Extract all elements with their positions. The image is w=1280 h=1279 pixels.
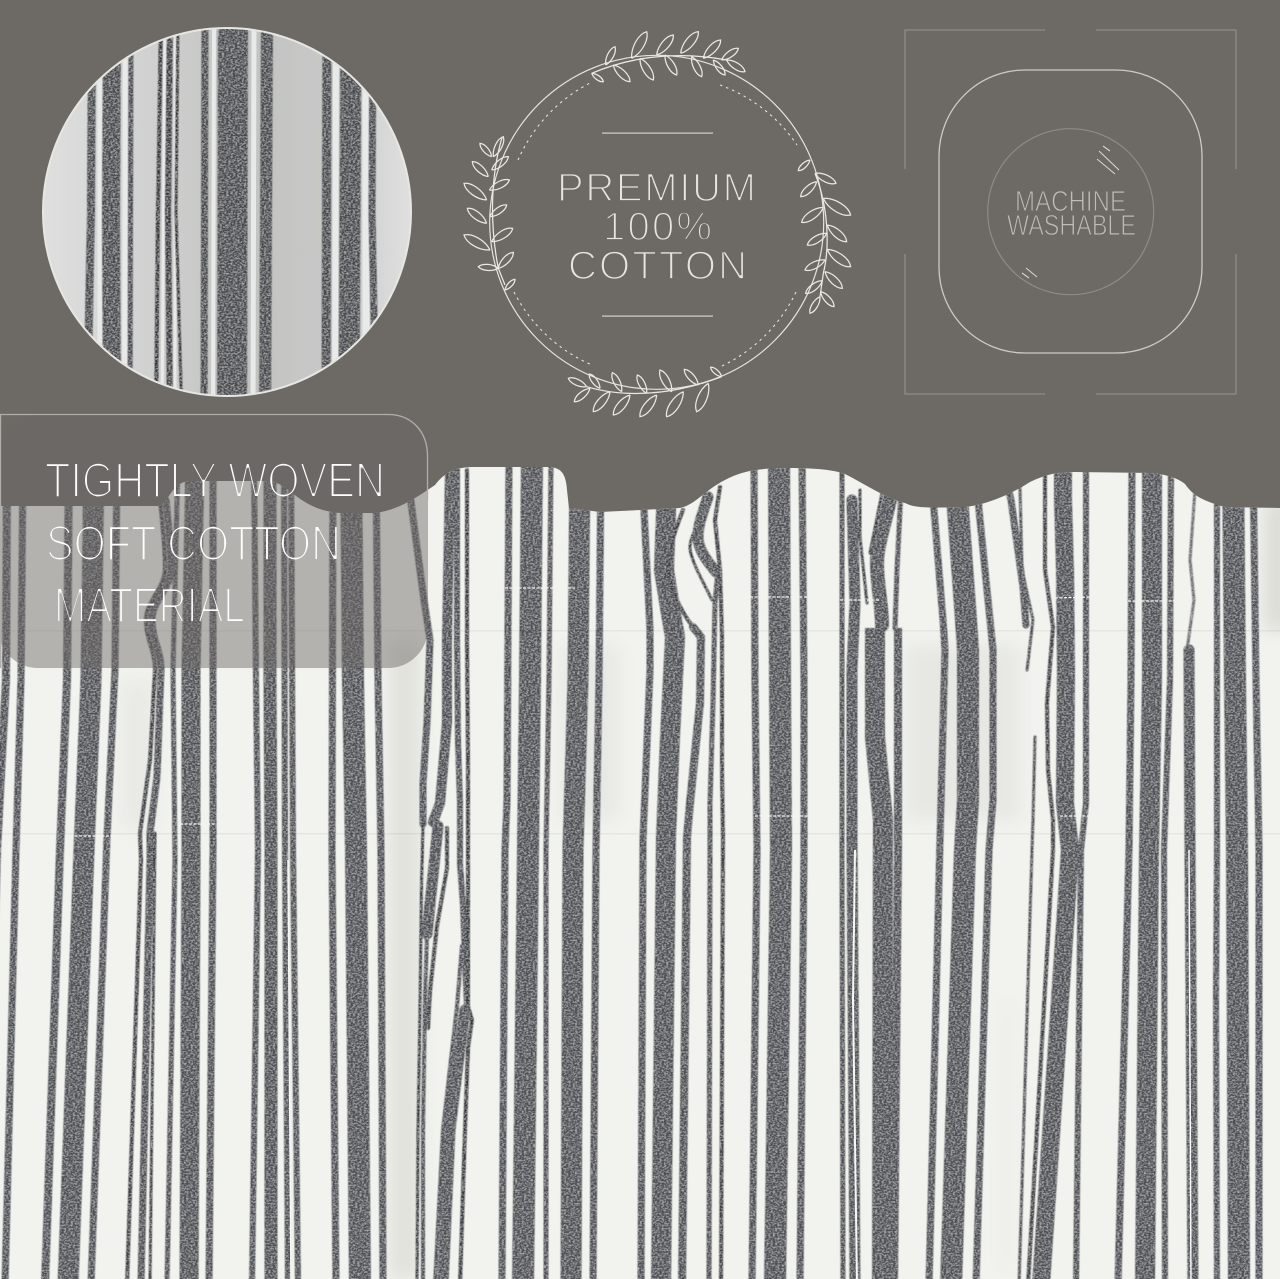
badge divider top [602, 132, 713, 134]
badge label [1007, 186, 1136, 242]
badge label: MACHINE [1015, 186, 1126, 218]
callout text: SOFT COTTON [46, 517, 341, 571]
panel: tightly woven material callout [0, 414, 428, 668]
wreath branches [461, 29, 853, 419]
corner brackets [905, 30, 1236, 394]
premium cotton wreath badge [461, 29, 853, 419]
fabric swatch circle [43, 20, 411, 420]
badge divider bottom [602, 316, 713, 317]
badge text: COTTON [568, 244, 747, 288]
callout text [45, 454, 385, 633]
machine washable badge [905, 30, 1236, 394]
badge text: 100% [603, 205, 712, 249]
inner circle [988, 129, 1154, 295]
badge text: PREMIUM [557, 166, 756, 210]
shine marks [1022, 146, 1119, 278]
callout text: MATERIAL [54, 579, 245, 633]
badge text [557, 166, 756, 288]
badge label: WASHABLE [1007, 210, 1136, 242]
curtain photo: striped fabric [0, 450, 1280, 1279]
wreath rings [490, 55, 824, 389]
callout text: TIGHTLY WOVEN [45, 454, 385, 508]
rounded square outline [939, 70, 1202, 353]
